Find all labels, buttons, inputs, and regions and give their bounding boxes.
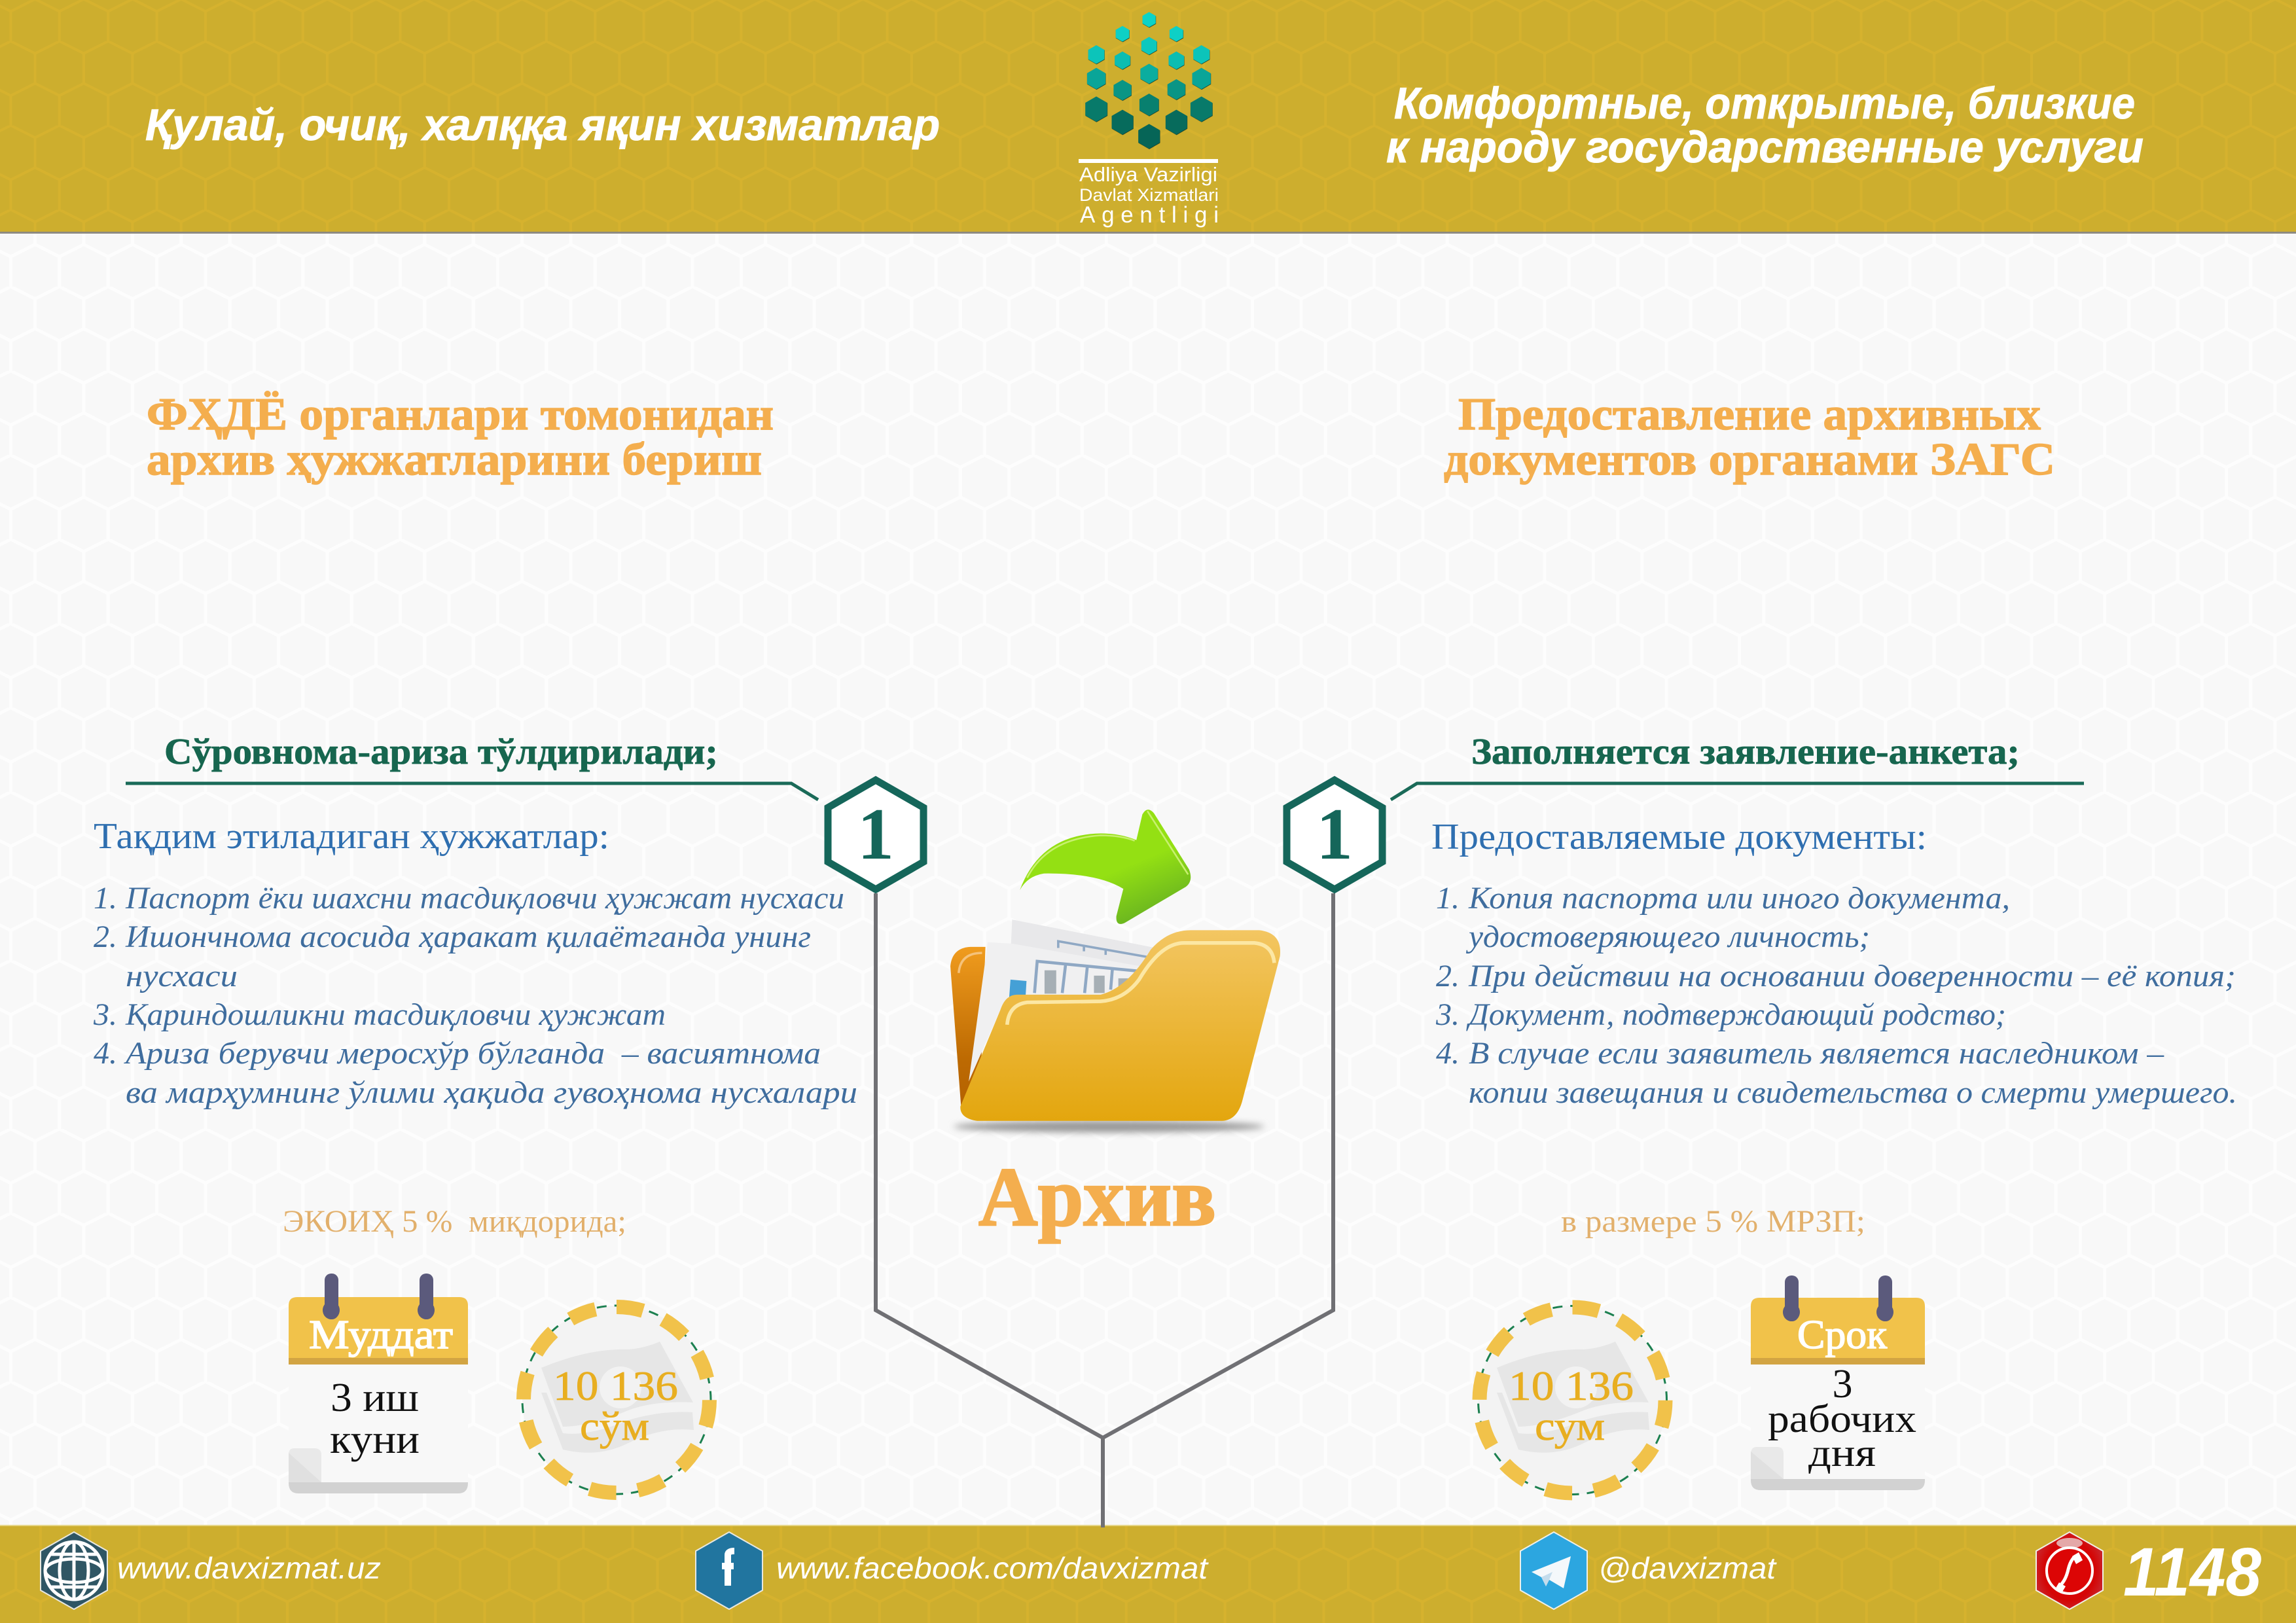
documents list right: В случае если заявитель является наследником – [1469, 1036, 2164, 1071]
documents list left: 4. [94, 1036, 117, 1071]
documents list right: 1. [1436, 881, 1460, 916]
logo hexagons [1085, 12, 1212, 149]
logo bar [1079, 159, 1218, 163]
documents heading right: Предоставляемые документы: [1431, 817, 1927, 857]
section title right: Предоставление архивных [1458, 389, 2041, 440]
calendar right [1751, 1275, 1925, 1490]
section title left: ФҲДЁ органлари томонидан [147, 389, 774, 440]
documents list left: Ариза берувчи меросхўр бўлганда – васиятнома [124, 1036, 821, 1071]
step heading left [126, 732, 818, 800]
documents list left: 3. [93, 997, 117, 1032]
arrow [1020, 810, 1191, 924]
section title left: архив ҳужжатларини бериш [147, 435, 762, 485]
section title right [1444, 389, 2055, 485]
calendar right: 3 [1833, 1362, 1852, 1406]
calendar right: рабочих [1768, 1397, 1916, 1440]
folder shadow [954, 1120, 1265, 1133]
documents heading left: Тақдим этиладиган ҳужжатлар: [94, 816, 609, 857]
hotline number: 1148 [2123, 1534, 2262, 1611]
step badge right [1287, 780, 1382, 889]
step badge left [828, 780, 924, 889]
calendar left: куни [330, 1418, 420, 1462]
documents list right: 2. [1436, 959, 1460, 993]
documents list right: При действии на основании доверенности – её копия; [1468, 959, 2236, 993]
documents list right: Документ, подтверждающий родство; [1466, 997, 2006, 1032]
documents list left: Ишончнома асосида ҳаракат қилаётганда унинг [125, 919, 811, 954]
documents list left: нусхаси [126, 959, 238, 993]
archive label: Архив [978, 1150, 1216, 1243]
footer band [0, 1525, 2296, 1623]
fee caption right: в размере 5 % МРЗП; [1561, 1204, 1865, 1239]
documents list left: Паспорт ёки шахсни тасдиқловчи ҳужжат нусхаси [125, 881, 844, 916]
fee caption left: ЭКОИҲ 5 % миқдорида; [283, 1204, 626, 1239]
documents list left: 1. [94, 881, 117, 916]
icon: telegram [1520, 1532, 1587, 1609]
header band [0, 0, 2296, 234]
fee badge left: 10 136 [553, 1363, 678, 1409]
step heading left: Сўровнома-ариза тўлдирилади; [164, 732, 718, 772]
documents list right: 3. [1435, 997, 1460, 1032]
calendar right: дня [1808, 1431, 1876, 1474]
documents list right: Копия паспорта или иного документа, [1468, 881, 2010, 916]
header slogan russian: Комфортные, открытые, близкие [1394, 79, 2135, 128]
logo [1079, 12, 1219, 228]
fee badge right: 10 136 [1509, 1363, 1634, 1409]
documents list right: удостоверяющего личность; [1465, 919, 1870, 954]
documents list right [1435, 881, 2237, 1110]
section title left [147, 389, 774, 485]
documents list left: Қариндошликни тасдиқловчи ҳужжат [125, 997, 666, 1032]
website text: www.davxizmat.uz [117, 1551, 381, 1585]
step badge left: 1 [857, 794, 894, 875]
icon: phone [2036, 1532, 2103, 1609]
logo wordmark: Adliya Vazirligi [1079, 163, 1217, 186]
telegram text: @davxizmat [1598, 1551, 1777, 1585]
fee badge left: сўм [580, 1404, 649, 1449]
documents [969, 919, 1156, 1082]
calendar left: 3 иш [331, 1376, 419, 1420]
step badge right: 1 [1316, 794, 1353, 875]
fee badge right: сум [1535, 1404, 1605, 1449]
calendar left [289, 1274, 468, 1493]
logo wordmark: Agentligi [1080, 202, 1219, 228]
header slogan russian: к народу государственные услуги [1386, 122, 2144, 172]
section title right: документов органами ЗАГС [1444, 435, 2055, 485]
step heading right: Заполняется заявление-анкета; [1471, 732, 2020, 772]
header slogan uzbek: Қулай, очиқ, халққа яқин хизматлар [145, 100, 940, 150]
calendar right: Срок [1797, 1313, 1888, 1357]
connector lines [876, 893, 1333, 1527]
calendar left: Муддат [309, 1313, 453, 1357]
facebook text: www.facebook.com/davxizmat [776, 1551, 1209, 1585]
icon: folder with arrow [950, 810, 1280, 1133]
step heading right [1391, 732, 2084, 800]
documents list left: 2. [94, 919, 117, 954]
icon: globe [41, 1532, 107, 1609]
logo wordmark [1079, 163, 1219, 228]
documents list left: ва марҳумнинг ўлими ҳақида гувоҳнома нусхалари [126, 1075, 857, 1110]
folder front [960, 930, 1280, 1121]
icon: facebook [696, 1532, 762, 1609]
folder back flap [950, 947, 986, 1107]
documents list right: копии завещания и свидетельства о смерти умершего. [1469, 1075, 2237, 1110]
documents list left [93, 881, 857, 1110]
fee badge left [522, 1306, 711, 1494]
logo wordmark: Davlat Xizmatlari [1079, 185, 1219, 205]
documents list right: 4. [1436, 1036, 1460, 1071]
fee badge right [1478, 1306, 1666, 1495]
header slogan russian [1386, 79, 2144, 172]
